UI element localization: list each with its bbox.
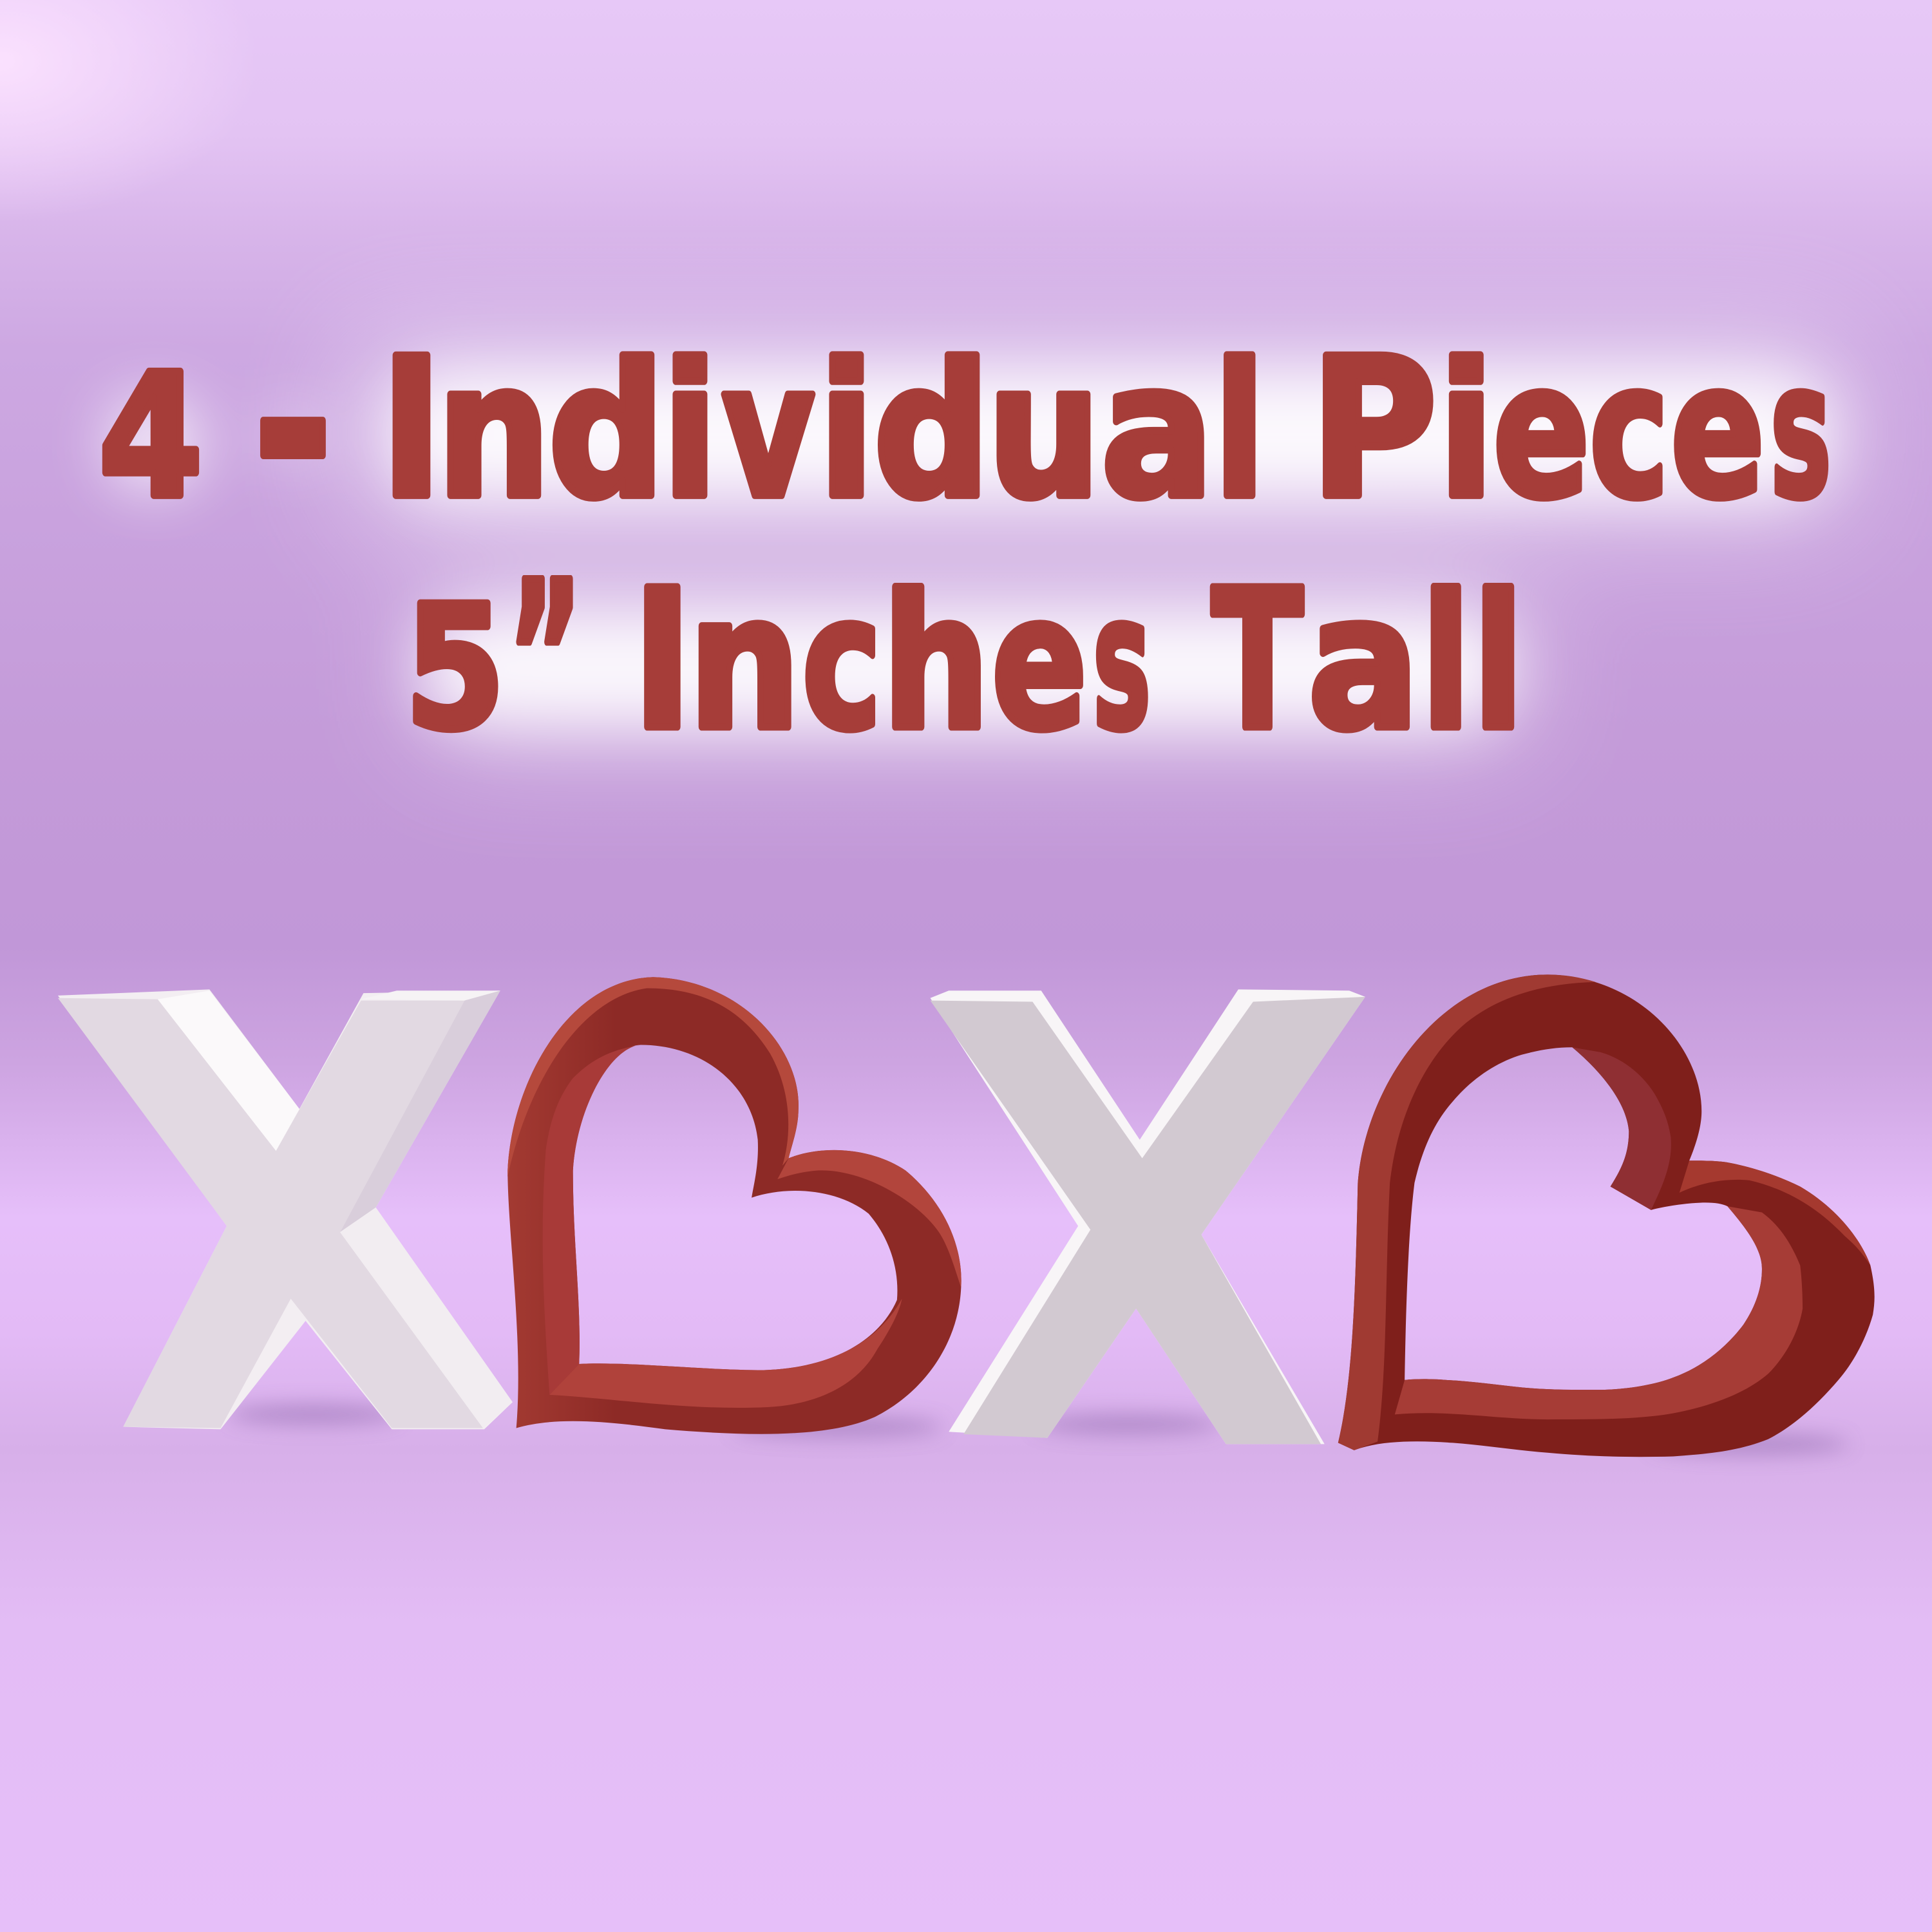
headline line 1: i: [662, 324, 717, 539]
headline line 2: s: [1093, 556, 1151, 771]
headline line 2: c: [802, 556, 882, 771]
headline line 1: d: [549, 324, 665, 539]
headline line 2: a: [1308, 556, 1419, 771]
headline line 2: T: [1212, 549, 1303, 773]
white letter X, second: [931, 989, 1365, 1444]
headline line 2: [405, 539, 1524, 775]
floor shadows: [228, 1405, 1848, 1454]
headline line 1: n: [437, 324, 551, 539]
headline line 2: I: [632, 549, 692, 773]
headline line 1: I: [381, 317, 442, 541]
headline line 1: i: [1439, 324, 1494, 539]
headline line 1: d: [874, 324, 990, 539]
headline line 1: c: [1589, 324, 1669, 539]
headline line 1: u: [987, 324, 1101, 539]
headline line 2: 5: [405, 570, 505, 768]
headline line 2: e: [992, 556, 1087, 771]
headline line 1: l: [1214, 324, 1265, 539]
white letter X, first: [58, 989, 513, 1429]
headline line 2: l: [1422, 556, 1470, 771]
headline line 1: v: [722, 324, 815, 539]
text glow: [111, 345, 1836, 739]
headline line 2: ”: [507, 539, 583, 775]
headline line 2: l: [1473, 556, 1524, 771]
headline line 1: -: [252, 281, 334, 567]
headline line 2: h: [882, 556, 990, 771]
headline line 1: P: [1311, 317, 1437, 541]
headline line 2: n: [688, 556, 800, 771]
headline line 1: 4: [99, 338, 203, 536]
headline line 1: [99, 281, 1831, 567]
headline line 1: s: [1770, 324, 1831, 539]
headline line 1: i: [819, 324, 874, 539]
headline line 1: a: [1101, 324, 1214, 539]
headline line 1: e: [1493, 324, 1589, 539]
red heart, first: [507, 977, 961, 1434]
headline line 1: e: [1671, 324, 1765, 539]
red heart, second: [1338, 974, 1875, 1457]
